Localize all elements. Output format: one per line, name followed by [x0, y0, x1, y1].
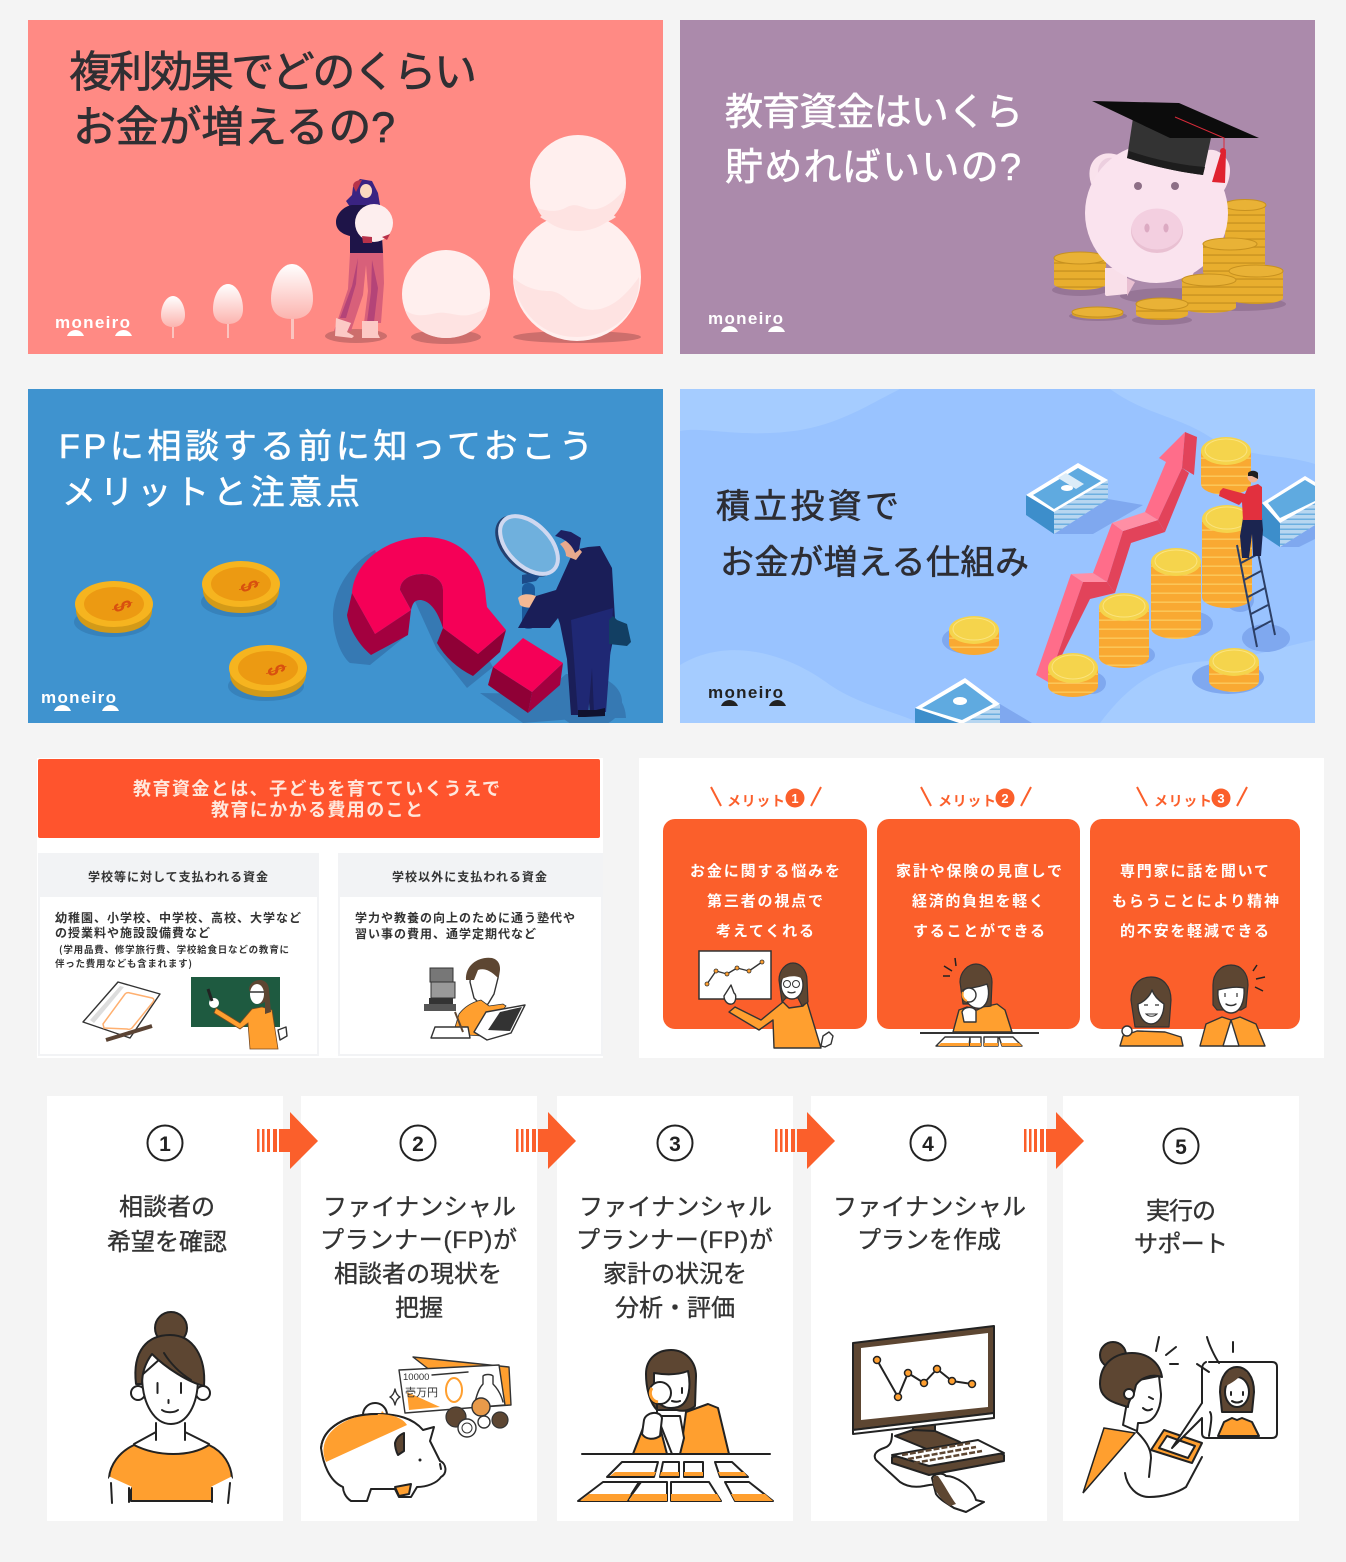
illustration: piggy bank and money — [321, 1357, 511, 1501]
merit card 2: 家計や保険の見直しで — [896, 860, 1062, 881]
cell: non-school payments — [339, 854, 602, 1055]
illustration: teacher at blackboard — [191, 977, 287, 1049]
step 2 text: 把握 — [395, 1295, 443, 1322]
title: FP consultation: FPに相談する前に知っておこう — [59, 428, 593, 466]
merit card 3: もらうことにより精神 — [1112, 890, 1279, 911]
illustration: two women — [1120, 965, 1265, 1046]
illustration: gold coins: $ — [234, 577, 265, 595]
cell: school payments: 伴った費用なども含まれます) — [55, 956, 192, 970]
step number 5: 5 — [1175, 1136, 1187, 1159]
merit labels — [711, 787, 1247, 811]
step 3 card — [557, 1096, 793, 1521]
step number 5 — [1164, 1128, 1198, 1164]
step number 4 — [910, 1126, 946, 1160]
arrow: step 1 to 2 — [257, 1112, 318, 1169]
heading banner: 教育資金とは、子どもを育てていくうえで — [133, 775, 500, 801]
illustration: woman on tablet video call — [1083, 1337, 1277, 1497]
cell: school payments: 幼稚園、小学校、中学校、高校、大学など — [55, 909, 301, 926]
step 1 text: 希望を確認 — [107, 1229, 227, 1256]
illustration: woman with magnifier — [920, 958, 1039, 1046]
arrow: step 4 to 5 — [1024, 1112, 1084, 1169]
merit labels: メリット — [938, 791, 996, 811]
merit labels: 2 — [1001, 791, 1009, 806]
panel: education fund banner — [680, 20, 1315, 354]
logo — [42, 691, 119, 711]
step 1 text: 相談者の — [119, 1194, 215, 1221]
illustration: computer with chart — [853, 1326, 1004, 1512]
step 2 text: ファイナンシャル — [323, 1194, 516, 1221]
step 5 text: 実行の — [1146, 1198, 1216, 1225]
title: education fund: 教育資金はいくら — [725, 92, 1023, 134]
step 3 text: 家計の状況を — [603, 1261, 747, 1288]
illustration: piggy bank and money: 壱万円 — [405, 1384, 438, 1400]
title: compound interest: 複利効果でどのくらい — [69, 49, 477, 97]
merit card 2: 経済的負担を軽く — [912, 890, 1044, 911]
merit card 3 — [1090, 819, 1300, 1046]
title: compound interest: お金が増えるの? — [73, 104, 395, 152]
title: FP consultation: メリットと注意点 — [62, 474, 360, 512]
illustration: gold coins: $ — [261, 661, 292, 679]
illustration: papers and pen — [83, 982, 160, 1040]
cell: non-school payments: 学力や教養の向上のために通う塾代や — [355, 909, 575, 926]
merit card 3: 専門家に話を聞いて — [1120, 860, 1269, 881]
illustration: coin stacks back — [1052, 200, 1286, 311]
merit card 1: 第三者の視点で — [707, 890, 823, 911]
logo: moneiro — [55, 313, 130, 332]
illustration: rising red arrow — [1036, 432, 1197, 682]
arrow: step 3 to 4 — [775, 1112, 835, 1169]
cell: non-school payments: 習い事の費用、通学定期代など — [355, 925, 536, 942]
illustration: saplings growing — [161, 264, 313, 339]
illustration: woman with chart — [699, 951, 833, 1048]
step 1 text — [107, 1194, 227, 1256]
illustration: medium snowball — [402, 250, 490, 344]
step number 1: 1 — [159, 1133, 171, 1156]
heading banner: 教育にかかる費用のこと — [211, 796, 423, 822]
cell: school payments: (学用品費、修学旅行費、学校給食日などの教育に — [59, 942, 289, 956]
step 4 text: プランを作成 — [857, 1227, 1001, 1254]
cell: school payments: 学校等に対して支払われる資金 — [88, 868, 268, 885]
step 2 text — [320, 1194, 517, 1322]
step 3 text — [576, 1194, 773, 1322]
step 4 text — [833, 1194, 1026, 1254]
title: accumulation investing: お金が増える仕組み — [720, 544, 1029, 582]
panel: education fund definition — [37, 758, 603, 1058]
merit labels: 1 — [791, 791, 799, 806]
illustration: piggy bank — [1085, 143, 1230, 296]
illustration: woman carrying snowball — [325, 179, 393, 343]
step number 1 — [148, 1126, 182, 1160]
heading banner — [38, 759, 600, 838]
panel: compound interest banner — [28, 20, 663, 354]
merit card 2 — [877, 819, 1080, 1046]
illustration: coin stacks front — [1069, 238, 1283, 325]
step number 2 — [400, 1126, 436, 1160]
merit card 1: お金に関する悩みを — [690, 860, 840, 881]
step 5 text — [1134, 1198, 1228, 1258]
cell: non-school payments: 学校以外に支払われる資金 — [392, 868, 547, 885]
panel: FP consultation banner — [28, 389, 663, 728]
step 2 text: プランナー(FP)が — [320, 1227, 517, 1254]
illustration: banknote bundles — [915, 463, 1315, 724]
merit labels: メリット — [1154, 791, 1212, 811]
step number 4: 4 — [922, 1133, 934, 1156]
illustration: student studying — [424, 958, 525, 1040]
cell: school payments: の授業料や施設設備費など — [55, 924, 210, 941]
panel: accumulation investing banner — [680, 389, 1315, 724]
step 4 text: ファイナンシャル — [833, 1194, 1026, 1221]
illustration: question mark — [333, 537, 626, 723]
illustration: analyst with magnifier — [578, 1350, 773, 1501]
panel: merits — [639, 758, 1324, 1058]
illustration: graduation cap — [1092, 101, 1259, 183]
title: compound interest — [69, 49, 477, 152]
cell: school payments — [39, 854, 318, 1055]
step 2 card — [301, 1096, 537, 1521]
illustration: woman — [109, 1312, 232, 1503]
merit card 1 — [663, 819, 867, 1048]
title: FP consultation — [59, 428, 593, 512]
merit card 1: 考えてくれる — [716, 920, 814, 941]
illustration: gold coin stacks — [942, 437, 1290, 697]
step 5 card — [1063, 1096, 1299, 1521]
panel: steps — [47, 1096, 1299, 1521]
illustration: gold coins: $ — [107, 597, 138, 615]
step 3 text: 分析・評価 — [615, 1295, 735, 1322]
logo — [709, 686, 786, 706]
merit card 3: 的不安を軽減できる — [1120, 920, 1269, 941]
logo: moneiro — [708, 309, 783, 328]
step number 3 — [658, 1126, 692, 1160]
logo: moneiro — [41, 688, 116, 707]
step number 2: 2 — [412, 1133, 424, 1156]
step 1 card — [47, 1096, 283, 1521]
step 3 text: ファイナンシャル — [579, 1194, 772, 1221]
merit card 2: することができる — [913, 920, 1045, 941]
logo: moneiro — [708, 683, 783, 702]
step 4 card — [811, 1096, 1047, 1521]
title: education fund: 貯めればいいの? — [725, 147, 1021, 189]
illustration: piggy bank and money: 10000 — [403, 1372, 429, 1383]
illustration: large snowman — [513, 135, 641, 343]
step 5 text: サポート — [1134, 1231, 1228, 1258]
step 3 text: プランナー(FP)が — [576, 1227, 773, 1254]
title: education fund — [725, 92, 1023, 189]
title: accumulation investing — [716, 488, 1029, 582]
illustration: climber with ladder — [1219, 471, 1275, 647]
merit labels: 3 — [1217, 791, 1225, 806]
merit labels: メリット — [727, 791, 785, 811]
step 2 text: 相談者の現状を — [334, 1261, 502, 1288]
arrow: step 2 to 3 — [516, 1112, 576, 1169]
step number 3: 3 — [669, 1133, 681, 1156]
illustration: businessman with magnifier — [495, 514, 631, 723]
illustration: gold coins — [74, 561, 307, 701]
title: accumulation investing: 積立投資で — [716, 488, 899, 526]
